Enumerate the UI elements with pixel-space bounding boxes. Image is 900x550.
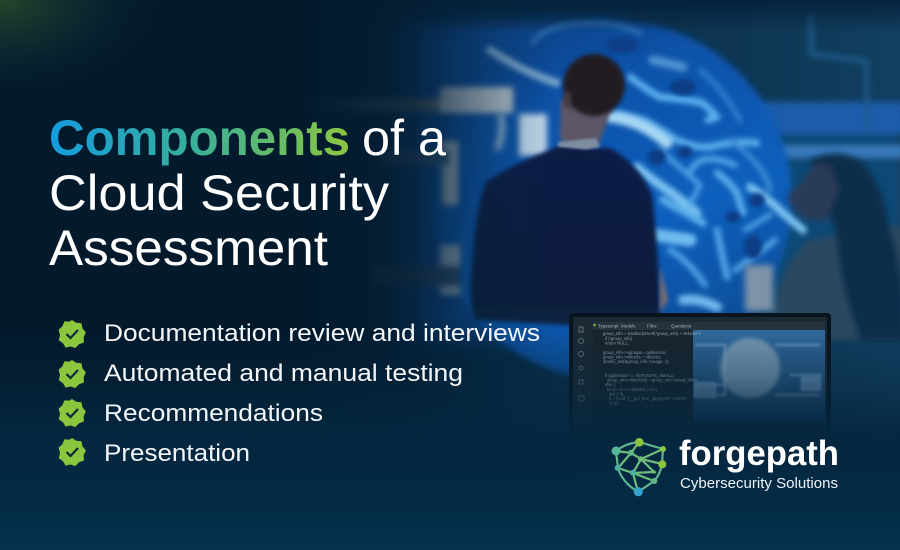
bottom dark overlay [0,330,900,550]
laptop with code editor [569,313,831,453]
forgepath logo [612,434,839,496]
editor tab bar: Typescript [598,324,619,328]
code panel: else { [605,382,616,387]
editor tab bar: Questions [671,324,692,328]
code panel: if (!b) [609,401,619,406]
editor sidebar icons [578,327,584,401]
lower teal tint [0,440,900,550]
code panel: group_info->blocks[0] = group_info->small_block; [607,378,699,382]
glowing globe [432,20,803,380]
item: testing: Automated and manual testing [104,360,463,387]
code panel: if (!group_info) [605,336,633,341]
code panel [593,328,701,423]
blue wall behind globe, left side [400,20,620,340]
code panel: group_info->nblocks = nblocks; [603,354,661,360]
blurred wall panels [700,12,900,334]
editor tab bar: Files [647,324,657,328]
editor tab bar: Models [621,324,636,328]
code panel: group_info = kmalloc(sizeof(*group_info) + nblocks*s [603,331,701,336]
title: Assessment [49,220,328,276]
wordmark: forgepath [679,434,839,473]
checklist [59,320,540,467]
woman in profile [745,154,900,340]
item: presentation [59,438,250,467]
laptop image pane: cloud globe [692,330,825,422]
green corner glow [0,0,200,120]
code panel: return NULL; [605,340,629,346]
code panel: for (i = 0; i < nblocks; i++) { [607,387,657,392]
code panel: atomic_set(&group_info->usage, 1); [603,359,670,364]
code panel: group_info->ngroups = gidsetsize; [603,350,666,355]
top fade [0,0,900,32]
item: documentation review: Documentation review and interviews [104,320,540,347]
title: Components [49,110,350,166]
editor tab bar [593,322,825,330]
item: presentation: Presentation [104,440,250,467]
tagline: Cybersecurity Solutions [680,476,838,492]
item: recommendations: Recommendations [104,400,323,427]
code panel: if (gidsetsize <= NGROUPS_SMALL) [605,373,675,378]
title [49,110,446,276]
blurred bright screens left of man [300,87,547,295]
title: of a [362,110,446,166]
man seen from behind [471,54,668,330]
code panel: gid_t *b; [609,392,624,396]
icon: network shield [612,438,666,496]
title: Cloud Security [49,165,389,221]
code panel: b = (void *)__get_free_page(GFP_USER); [609,396,688,401]
